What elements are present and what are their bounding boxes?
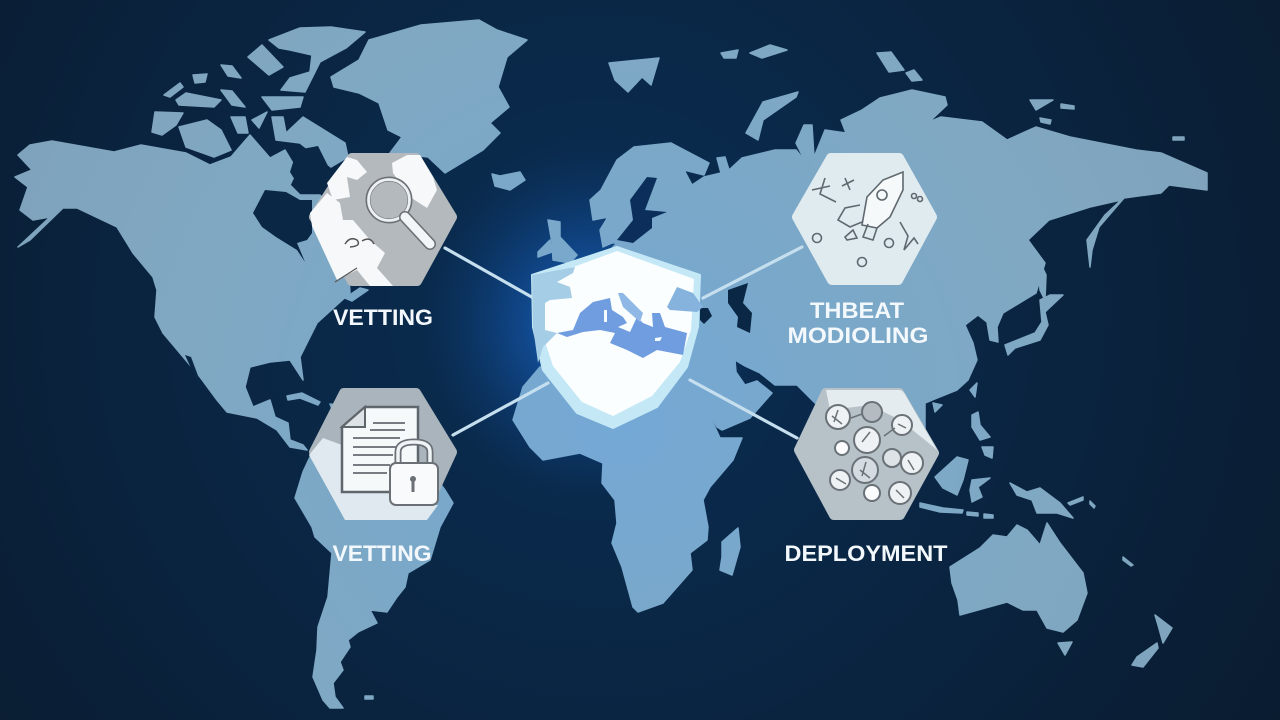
Novaya Zemlya	[746, 92, 798, 140]
hexagon body	[314, 393, 452, 515]
South America	[295, 440, 453, 708]
Foxe Basin	[290, 146, 330, 188]
label: THREAT MODELING: MODIOLING	[788, 323, 928, 348]
hexagon: top-left vetting	[310, 155, 452, 286]
icon: cluster of nodes	[826, 402, 923, 504]
shield inner highlight	[538, 251, 694, 416]
Sardinia	[604, 310, 607, 322]
icon: rocket	[812, 172, 922, 266]
Crete	[655, 337, 662, 341]
icon: document	[342, 407, 418, 492]
connector: top-right	[703, 247, 802, 298]
Adriatic	[618, 293, 643, 322]
Nova Scotia sliver	[345, 288, 368, 301]
Japan and Sakhalin	[1005, 295, 1063, 355]
label: THREAT MODELING	[788, 298, 928, 348]
label: bottom-left VETTING: VETTING	[332, 541, 432, 566]
Eurasia	[590, 90, 1207, 430]
white continent patches	[310, 155, 437, 286]
hexagon: top-right threat modelling	[797, 158, 932, 280]
shield body	[532, 247, 700, 428]
Falkland	[365, 696, 373, 699]
British Isles	[548, 220, 577, 263]
coast stroke	[335, 268, 357, 282]
Cuba and Hispaniola	[287, 393, 320, 405]
connector: bottom-left	[453, 383, 548, 435]
Hudson Bay	[253, 190, 312, 262]
Canadian arctic islands	[269, 27, 365, 92]
central shield	[532, 247, 703, 428]
Iberia and Atlantic patch	[532, 267, 575, 363]
hexagon: bottom-right deployment	[799, 390, 937, 515]
Iceland	[492, 172, 525, 190]
hexagon body	[799, 393, 934, 515]
lower pale patch	[309, 438, 438, 520]
Caspian	[728, 283, 752, 333]
Baltic	[617, 177, 667, 243]
Baja gulf	[185, 355, 203, 389]
New Zealand and Tasmania	[1155, 615, 1172, 643]
Australia	[950, 523, 1087, 632]
Southeast Asia islands	[935, 457, 968, 495]
Africa	[513, 350, 742, 612]
North America	[15, 135, 350, 450]
icon: padlock	[390, 442, 438, 505]
light upper patch	[826, 390, 937, 450]
Black Sea spot	[700, 308, 712, 324]
Black Sea patch	[667, 287, 703, 312]
Arctic islands east	[609, 58, 659, 92]
centre glow	[425, 150, 755, 500]
hexagon body	[314, 158, 452, 281]
Mediterranean	[557, 298, 687, 358]
Greenland	[331, 20, 527, 173]
hexagon body	[797, 158, 932, 280]
inland seas	[185, 146, 752, 389]
connector: bottom-right	[690, 380, 797, 438]
icon: magnifying glass	[368, 179, 430, 244]
label: DEPLOYMENT: DEPLOYMENT	[784, 541, 948, 566]
connector lines	[445, 247, 802, 438]
small outline glyph	[345, 239, 374, 247]
Madagascar	[720, 528, 740, 575]
label: top-left VETTING: VETTING	[333, 305, 433, 330]
connector: top-left	[445, 248, 537, 300]
label: THREAT MODELING: THBEAT	[810, 298, 905, 323]
hexagon: bottom-left vetting	[309, 393, 452, 520]
